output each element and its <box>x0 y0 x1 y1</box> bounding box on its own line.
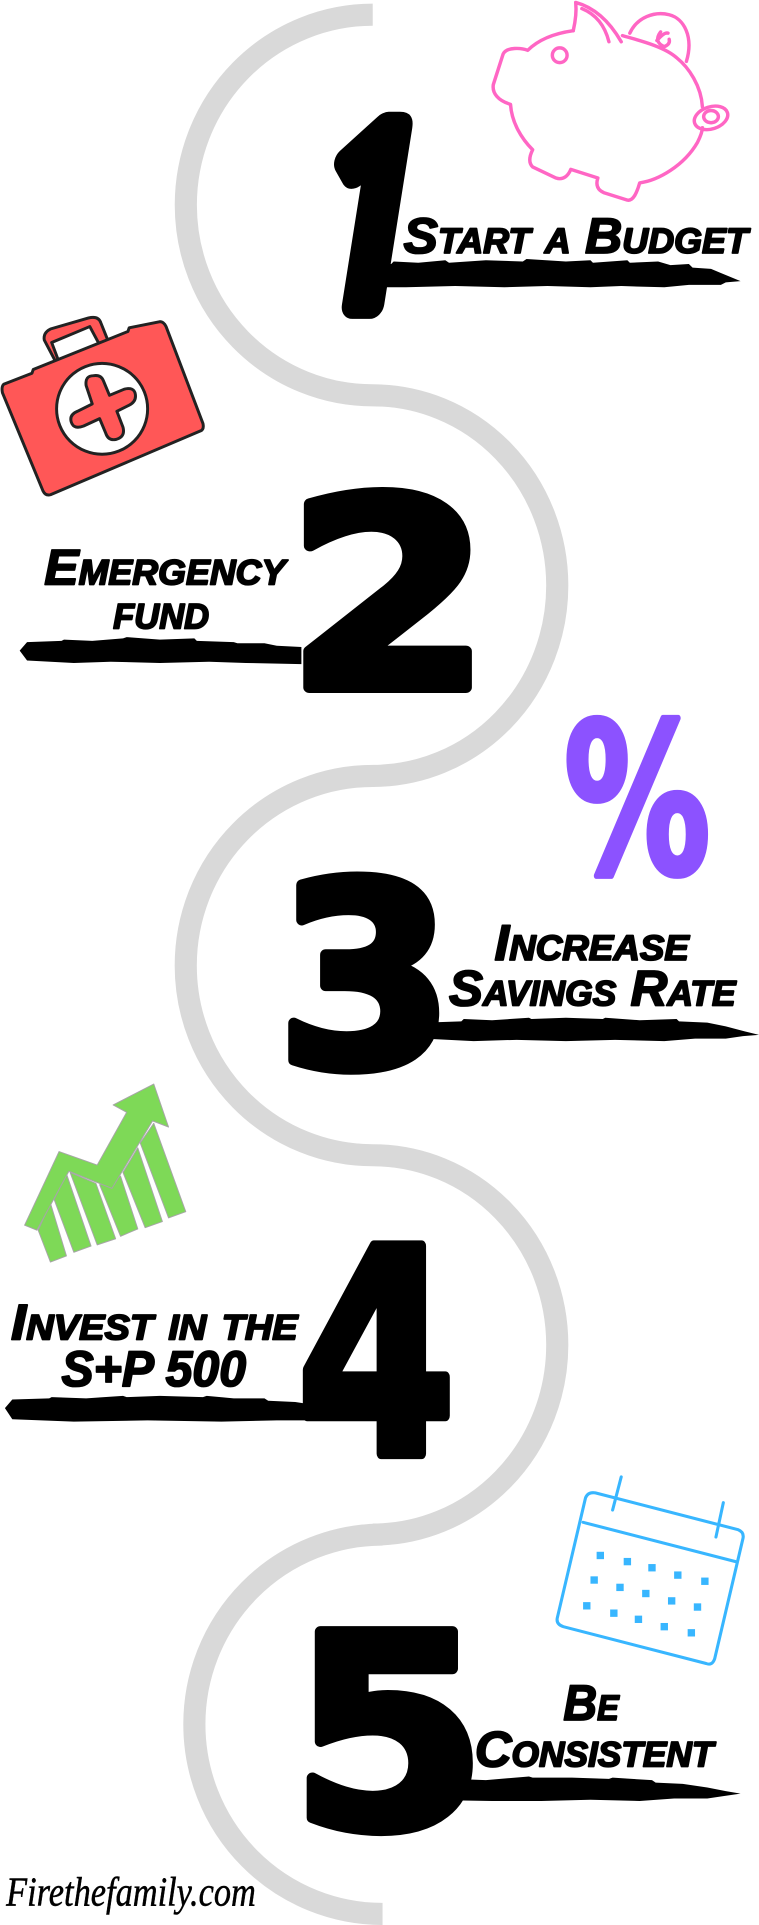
label: increase savings rate: Savings Rate <box>449 960 737 1016</box>
icon: first aid kit <box>2 317 203 495</box>
brush underline 3 <box>424 1018 759 1041</box>
label: increase savings rate <box>449 914 737 1016</box>
label: be consistent <box>475 1674 716 1778</box>
icon: piggy bank <box>493 2 731 200</box>
brush underline 1 <box>375 259 741 287</box>
brush underline 5 <box>418 1776 741 1801</box>
label: emergency fund: fund <box>113 583 209 640</box>
icon: growth chart <box>25 1084 186 1262</box>
label: invest in the s&p 500: Invest in the <box>11 1293 299 1350</box>
brush underline 2 <box>20 637 301 664</box>
icon: calendar <box>557 1477 743 1664</box>
website credit: Firethefamily.com <box>5 1869 256 1915</box>
label: be consistent: Be <box>563 1674 620 1731</box>
label: increase savings rate: Increase <box>495 914 691 971</box>
label: start a budget: Start a Budget <box>403 207 751 264</box>
label: emergency fund: Emergency <box>44 538 288 595</box>
winding grey road <box>186 15 557 1914</box>
label: invest in the s&p 500: S+P 500 <box>62 1340 246 1397</box>
brush underline 4 <box>5 1396 363 1422</box>
digit 1: 1 <box>288 104 454 344</box>
digit 2: 2 <box>286 444 491 750</box>
digit 4: 4 <box>297 1189 456 1521</box>
label: emergency fund <box>44 538 288 640</box>
icon: percent sign: % <box>564 680 711 923</box>
label: be consistent: Consistent <box>475 1721 716 1778</box>
digit 5: 5 <box>291 1578 487 1890</box>
digit 3: 3 <box>277 830 454 1126</box>
calendar day dots <box>583 1552 709 1636</box>
label: invest in the s&p 500 <box>11 1293 299 1397</box>
